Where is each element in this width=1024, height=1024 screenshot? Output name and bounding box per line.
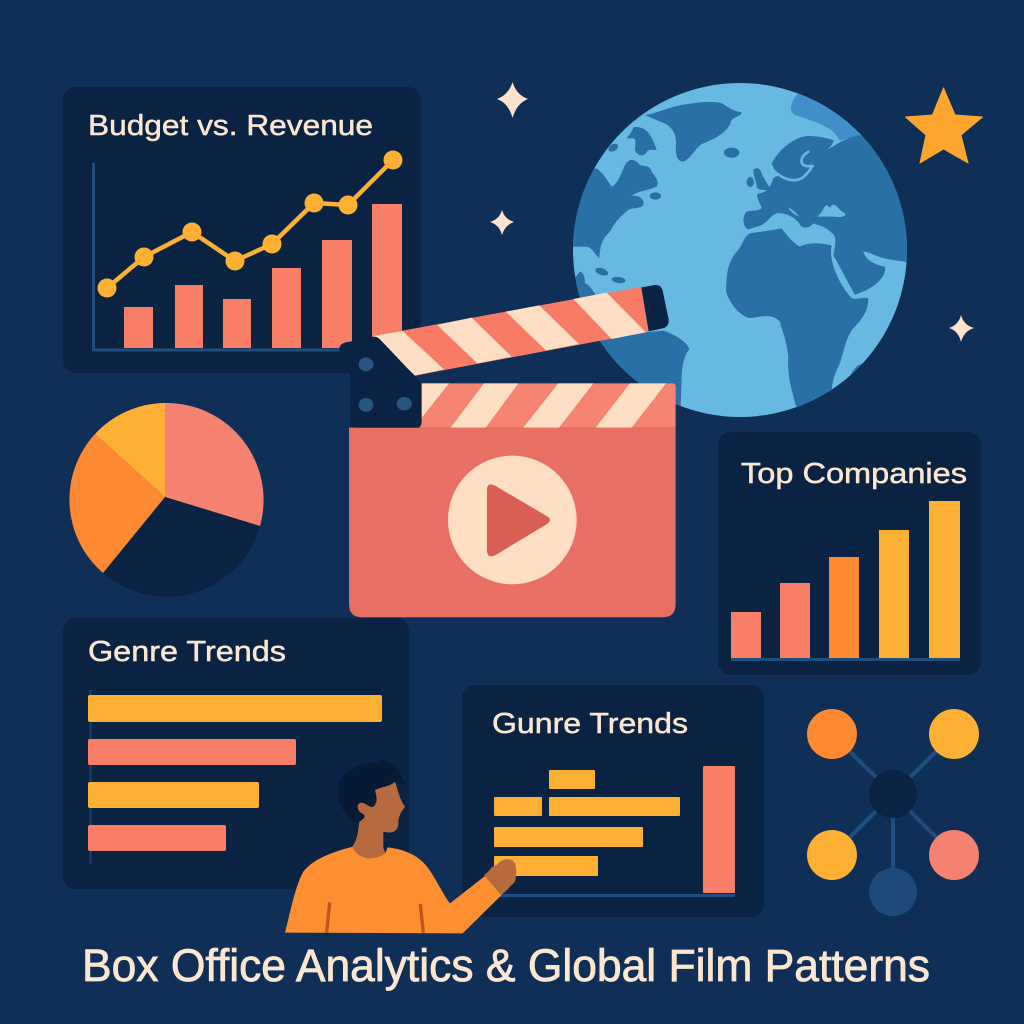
bar chart: gunre xyxy=(494,766,735,897)
clapper hinge xyxy=(339,337,422,428)
person neck and face xyxy=(353,782,405,858)
clapper top arm xyxy=(373,285,669,376)
person sweater xyxy=(285,847,502,933)
panel: budget vs revenue xyxy=(63,87,421,373)
panel: gunre trends xyxy=(462,685,764,917)
globe xyxy=(567,83,913,423)
panel: top companies xyxy=(718,432,981,675)
icon: sparkle middle xyxy=(490,210,514,235)
bar chart: companies xyxy=(731,501,960,661)
pie chart xyxy=(69,403,264,597)
budget trend line xyxy=(98,150,402,298)
icon: gold star xyxy=(906,88,982,163)
person fist xyxy=(484,859,516,895)
clapper striped band xyxy=(420,383,676,428)
clapper body xyxy=(349,428,676,617)
person hair xyxy=(338,760,405,823)
icon: sparkle top xyxy=(497,82,528,118)
icon: sparkle right xyxy=(949,315,974,342)
heading: gunre trends: Gunre Trends xyxy=(492,708,688,740)
clapperboard xyxy=(339,285,676,617)
play button xyxy=(448,456,577,584)
heading: genre trends: Genre Trends xyxy=(88,636,286,668)
network diagram xyxy=(807,709,979,916)
heading: budget vs revenue: Budget vs. Revenue xyxy=(88,110,373,142)
revenue bars xyxy=(124,204,402,348)
chart axes xyxy=(94,163,345,350)
panel: genre trends xyxy=(63,618,409,889)
person presenting xyxy=(285,760,516,933)
horizontal bar chart: genres xyxy=(88,690,382,864)
heading: top companies: Top Companies xyxy=(741,458,967,490)
title: Box Office Analytics & Global Film Patterns xyxy=(82,940,930,991)
sweater folds xyxy=(327,902,423,933)
